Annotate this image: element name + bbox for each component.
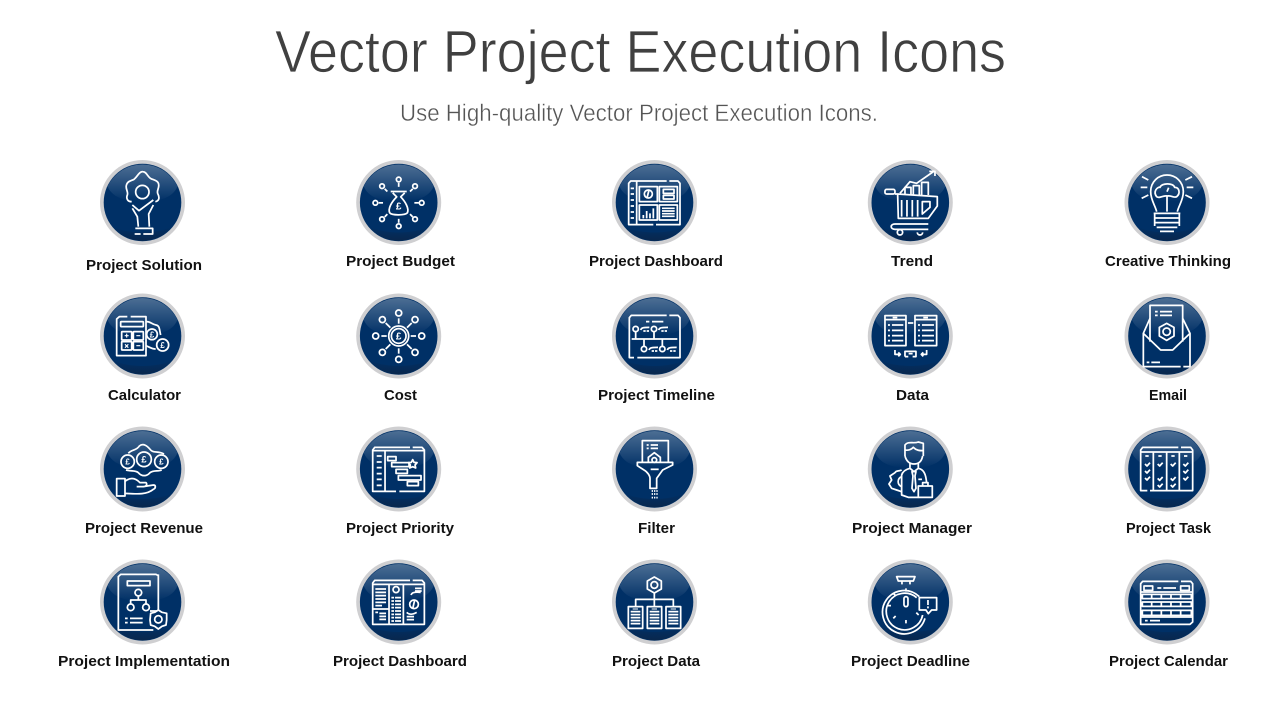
label: Calculator: [108, 387, 181, 404]
icon: gear and hand: [126, 172, 159, 234]
label: Project Task: [1126, 520, 1212, 537]
label: Project Data: [612, 653, 701, 670]
panel: Email: [1124, 294, 1210, 404]
panel: Creative Thinking: [1105, 160, 1231, 270]
icon: two data tables: [885, 316, 937, 357]
label: Project Deadline: [851, 653, 970, 670]
icon: task board with checks: [1141, 447, 1193, 491]
label: Filter: [638, 520, 675, 537]
icon: calculator with coins: £: [150, 330, 155, 339]
label: Project Solution: [86, 257, 202, 274]
icon: envelope with letter: [1143, 305, 1190, 367]
panel: Project Manager: [852, 426, 972, 537]
panel: Project Calendar: [1109, 560, 1228, 670]
title: Vector Project Execution Icons: [275, 19, 1006, 85]
subtitle: Use High-quality Vector Project Execution Icons.: [400, 100, 878, 127]
panel: Data: [868, 294, 953, 404]
label: Project Dashboard: [333, 653, 467, 670]
label: Project Priority: [346, 520, 455, 537]
panel: Project Revenue: [85, 426, 203, 537]
icon: coin with radiating nodes: £: [396, 332, 402, 343]
icon: document with org chart and gear: [118, 574, 167, 630]
panel: Project Solution: [86, 160, 202, 274]
icon: hand with coins: £: [125, 458, 130, 467]
panel: Project Priority: [346, 426, 455, 537]
panel: Project Implementation: [58, 560, 230, 670]
panel: Project Dashboard: [589, 160, 723, 270]
label: Project Revenue: [85, 520, 203, 537]
panel: Calculator: [100, 294, 185, 404]
panel: Trend: [868, 160, 953, 270]
label: Project Timeline: [598, 387, 715, 404]
panel: Project Task: [1124, 426, 1212, 537]
label: Project Budget: [346, 253, 455, 270]
label: Email: [1149, 387, 1187, 404]
panel: Project Budget: [346, 160, 455, 270]
icon: timeline screen: [629, 315, 680, 358]
icon: light bulb: [1141, 175, 1193, 231]
panel: Filter: [612, 426, 697, 537]
icon: gear with three tables: [628, 577, 681, 628]
icon: funnel with document: [637, 441, 673, 498]
label: Project Calendar: [1109, 653, 1228, 670]
panel: Cost: [356, 294, 441, 404]
panel: Project Deadline: [851, 560, 970, 670]
icon: stopwatch with alert: [883, 577, 937, 634]
icon: calculator with coins: [117, 317, 169, 356]
label: Data: [896, 387, 930, 404]
label: Creative Thinking: [1105, 253, 1231, 270]
icon: dashboard screen: [629, 181, 680, 225]
label: Project Dashboard: [589, 253, 723, 270]
label: Project Manager: [852, 520, 972, 537]
panel: Project Data: [612, 560, 701, 670]
panel: Project Timeline: [598, 294, 715, 404]
icon: cart with rising chart: [885, 171, 937, 235]
label: Trend: [891, 253, 933, 270]
label: Project Implementation: [58, 653, 230, 670]
icon: manager with gear and briefcase: [889, 442, 932, 497]
icon: data dashboard: [373, 580, 424, 624]
label: Cost: [384, 387, 417, 404]
icon: hand with coins: £: [141, 455, 147, 465]
icon: money bag: £: [396, 201, 402, 212]
icon: hand with coins: £: [159, 458, 164, 467]
icon: calculator with coins: £: [160, 341, 165, 350]
panel: Project Dashboard 2: [333, 560, 467, 670]
icon: hand with coins: [117, 445, 168, 496]
icon: gantt chart with star: [373, 447, 424, 491]
icon: calendar grid: [1141, 581, 1193, 624]
